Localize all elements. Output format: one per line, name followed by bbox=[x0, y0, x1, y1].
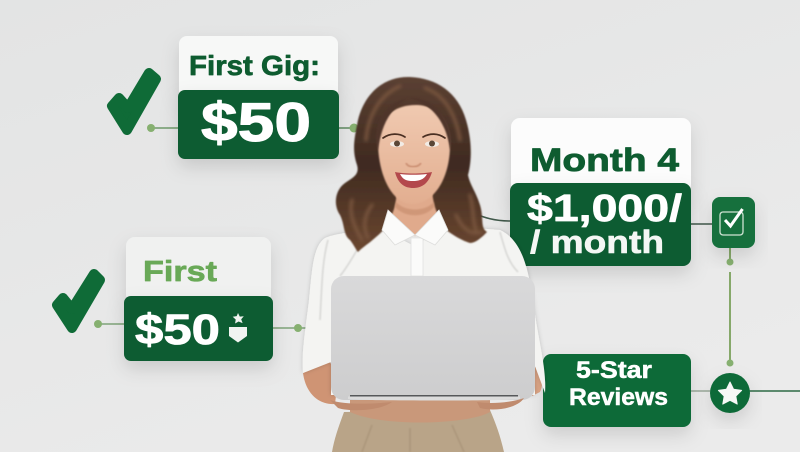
panel: month 4 bbox=[510, 118, 691, 266]
text: Reviews: Reviews bbox=[569, 384, 668, 411]
value: $1,000/: $1,000/ bbox=[527, 188, 683, 230]
nose bbox=[406, 163, 421, 167]
forehead hair sweep bbox=[376, 98, 451, 150]
left forearm bbox=[303, 362, 338, 404]
icon: star badge bbox=[229, 313, 247, 342]
collar bbox=[382, 210, 448, 245]
value: $50: $50 bbox=[135, 306, 220, 354]
icon: check mark bottom bbox=[57, 274, 100, 328]
woman holding laptop bbox=[303, 77, 545, 452]
laptop bbox=[331, 276, 535, 400]
shirt bbox=[303, 228, 545, 395]
hair highlights bbox=[351, 86, 482, 240]
right hand side skin bbox=[532, 366, 542, 396]
connector lines and dots bbox=[94, 124, 800, 391]
icon: checkbox bbox=[712, 197, 755, 248]
hands bbox=[330, 398, 524, 410]
icon: star circle bbox=[710, 373, 750, 413]
heading: first: First bbox=[143, 256, 217, 288]
neck bbox=[390, 190, 440, 236]
value: / month: / month bbox=[530, 224, 664, 260]
panel: first $50 bbox=[124, 237, 273, 361]
value: $50: $50 bbox=[201, 91, 311, 153]
face bbox=[378, 105, 450, 204]
panel: first gig bbox=[178, 36, 339, 159]
eyes bbox=[390, 140, 439, 147]
text: 5-Star: 5-Star bbox=[576, 357, 652, 384]
midriff bbox=[350, 398, 490, 423]
heading: month 4: Month 4 bbox=[530, 142, 679, 178]
heading: first gig: First Gig: bbox=[189, 50, 320, 81]
placket bbox=[411, 238, 423, 276]
hair bbox=[336, 77, 487, 252]
panel: 5-star reviews bbox=[543, 354, 691, 427]
brows bbox=[383, 134, 445, 138]
shirt folds bbox=[320, 232, 518, 320]
icon: check mark top bbox=[112, 73, 156, 130]
skirt bbox=[332, 410, 504, 452]
laptop slot bbox=[350, 395, 518, 396]
smile bbox=[395, 172, 432, 188]
